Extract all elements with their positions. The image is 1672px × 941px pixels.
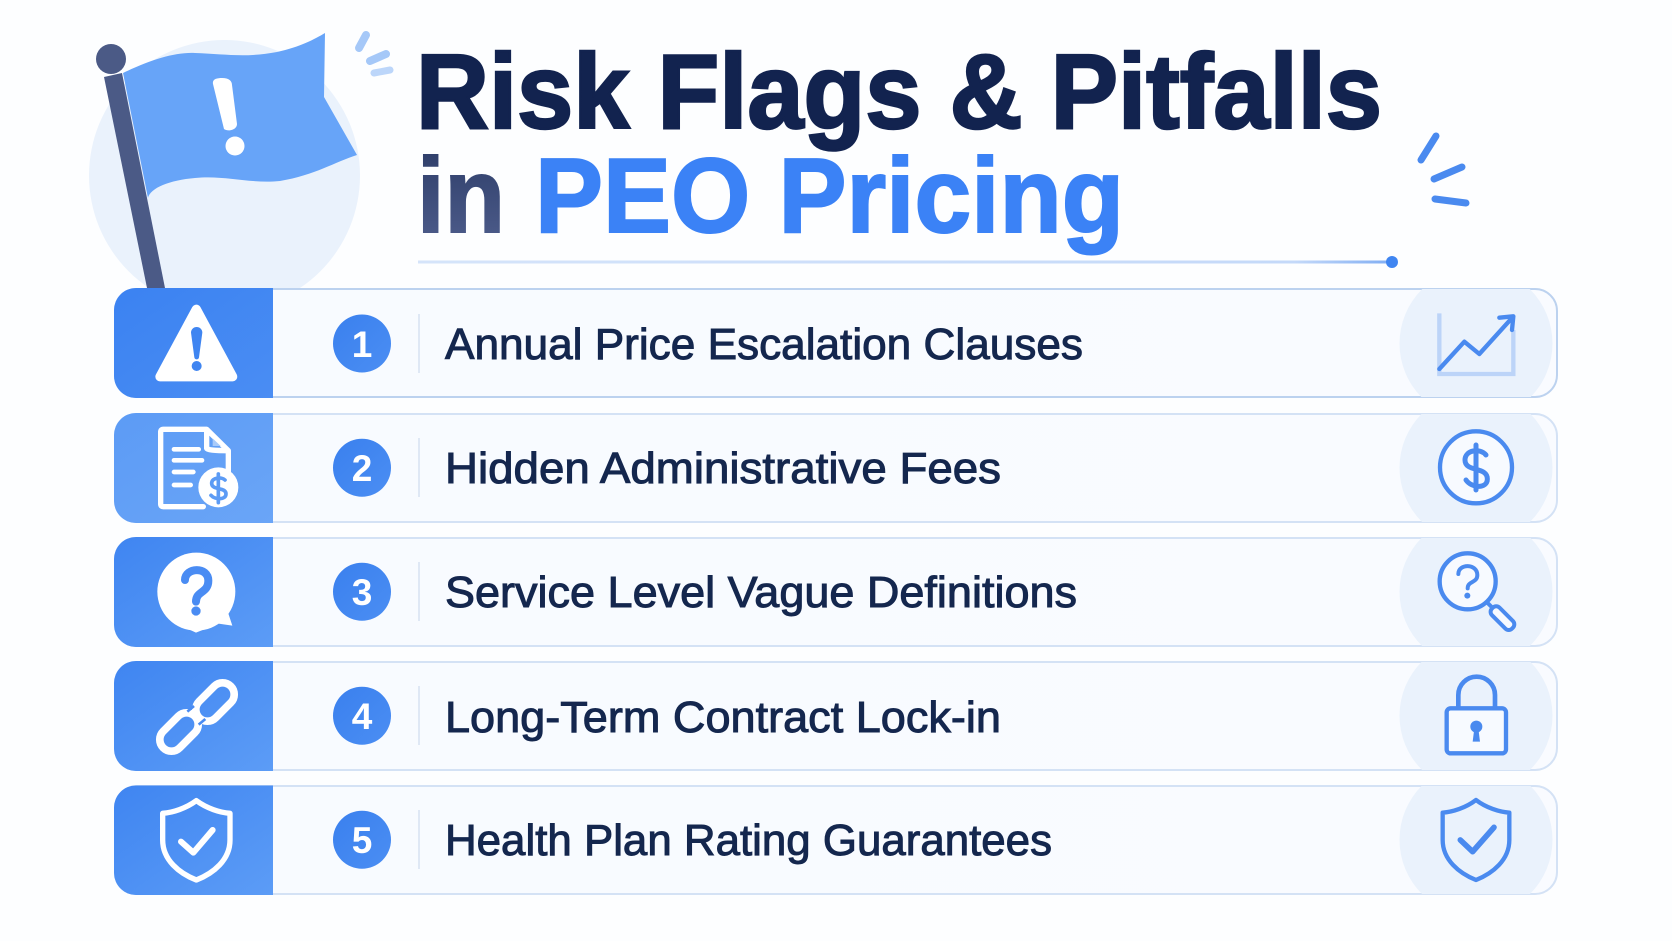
row 5 right icon disc [1400, 786, 1552, 894]
row 1 label: Annual Price Escalation Clauses [445, 320, 1083, 369]
row 3 label: Service Level Vague Definitions [445, 568, 1077, 617]
row 2: hidden administrative fees [114, 413, 1558, 523]
row 3 right icon disc [1400, 538, 1552, 646]
row 4 divider [418, 686, 420, 745]
row 2 right icon disc [1400, 414, 1552, 522]
icon: warning triangle [160, 309, 233, 377]
number 3 [333, 563, 391, 621]
flag backdrop circle [89, 40, 360, 311]
number 5: 5 [352, 820, 372, 861]
flag pole [104, 73, 165, 288]
icon: fee document [161, 429, 238, 507]
number 5 [333, 811, 391, 869]
number 4: 4 [352, 696, 373, 737]
row 4 coloured cell [114, 661, 273, 771]
flag sparks [359, 35, 390, 73]
title underline with dot [418, 256, 1398, 268]
row 3 divider [418, 562, 420, 621]
row 4 background [115, 662, 1557, 770]
row 5 background [115, 786, 1557, 894]
row 5: health plan rating guarantees [114, 785, 1558, 895]
row 3: service level vague definitions [114, 537, 1558, 647]
flag cloth [123, 33, 357, 198]
row 2 label: Hidden Administrative Fees [445, 444, 1001, 493]
row 1 divider [418, 314, 420, 373]
row 2 divider [418, 438, 420, 497]
title sparks [1421, 136, 1466, 203]
row 1 coloured cell [114, 288, 273, 398]
row 5 coloured cell [114, 786, 273, 895]
row 1: annual price escalation [114, 288, 1558, 398]
flag pole ball [96, 44, 126, 74]
row 1 background [115, 289, 1557, 397]
number 2: 2 [352, 448, 372, 489]
row 5 label: Health Plan Rating Guarantees [445, 816, 1052, 865]
title [416, 33, 1382, 255]
number 1 [333, 314, 391, 372]
row 5 divider [418, 810, 420, 869]
title line two lead: in [417, 137, 505, 255]
row 4: long-term contract lock-in [114, 661, 1558, 771]
flag exclamation mark [213, 78, 244, 156]
number 1: 1 [352, 324, 372, 365]
row 4 label: Long-Term Contract Lock-in [445, 693, 1001, 742]
row 4 right icon disc [1400, 662, 1552, 770]
icon: outlined shield with check [1443, 800, 1509, 880]
number 2 [333, 439, 391, 497]
title line two highlight: PEO Pricing [535, 137, 1124, 255]
icon: magnifier with question [1440, 553, 1516, 632]
row 2 coloured cell [114, 413, 273, 523]
row 3 coloured cell [114, 537, 273, 647]
icon: rising chart [1439, 313, 1513, 374]
number 4 [333, 687, 391, 745]
title line one: Risk Flags & Pitfalls [416, 33, 1382, 151]
row 3 background [115, 538, 1557, 646]
icon: dollar coin [1440, 431, 1512, 503]
flag illustration [89, 33, 390, 311]
row 2 background [115, 414, 1557, 522]
number 3: 3 [352, 572, 372, 613]
icon: chain link [155, 678, 239, 756]
icon: question speech bubble [157, 553, 235, 633]
icon: shield with check [163, 801, 230, 880]
icon: padlock [1447, 677, 1506, 753]
row 1 right icon disc [1400, 289, 1552, 397]
